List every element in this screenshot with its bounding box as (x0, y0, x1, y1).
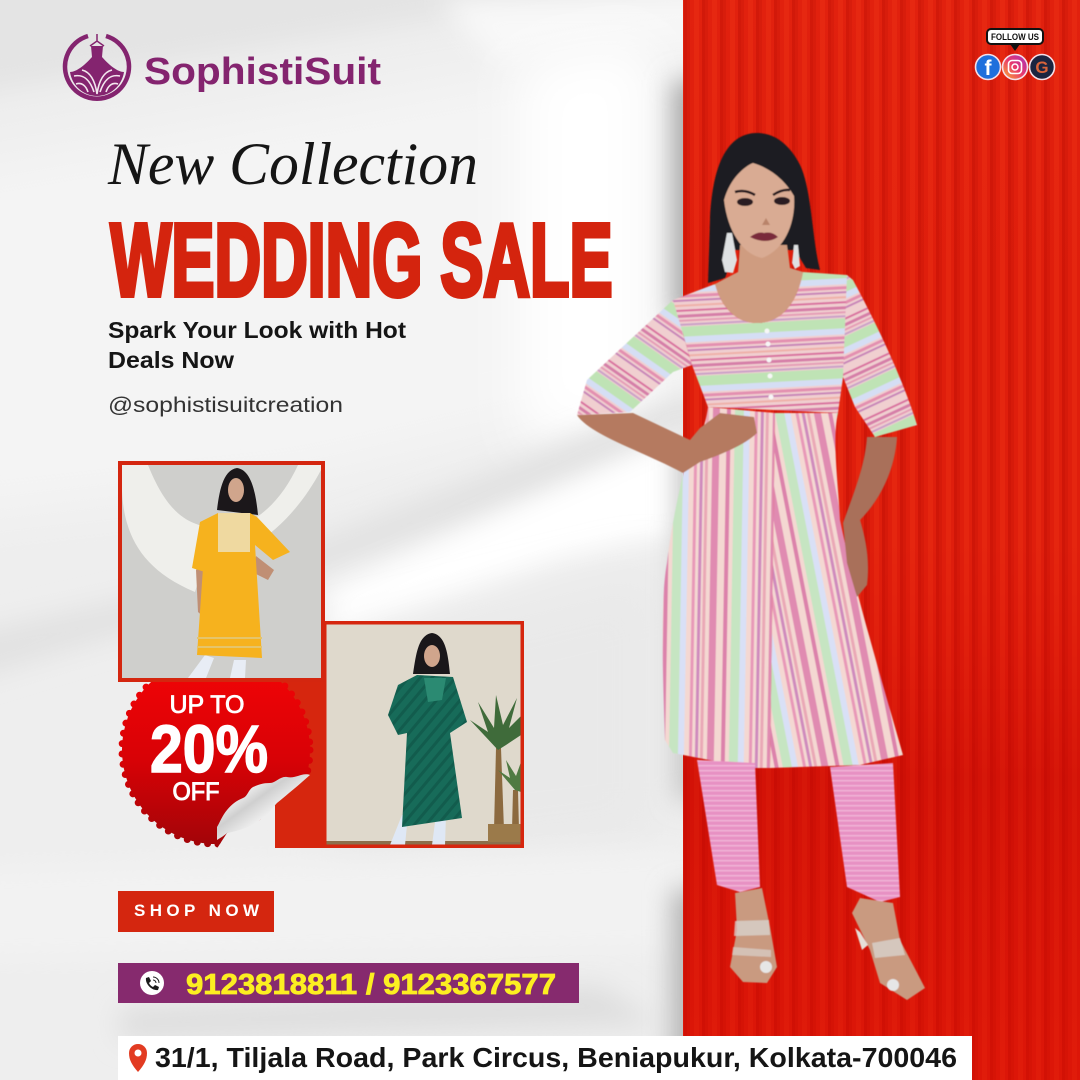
photo: green kurta (326, 624, 522, 845)
photo frame: green kurta (326, 624, 521, 845)
address text: 31/1, Tiljala Road, Park Circus, Beniapukur, Kolkata-700046 (155, 1042, 957, 1073)
kurta buttons (764, 328, 774, 400)
icon: facebook: f (984, 57, 992, 80)
pants (697, 760, 900, 902)
fabric background (0, 0, 740, 1080)
tagline: Spark Your Look with Hot (108, 317, 406, 343)
right foot and sandal (852, 898, 925, 1000)
brows, eyes, nose and lips (735, 190, 790, 241)
social handle: @sophistisuitcreation (108, 394, 343, 417)
photo: yellow kurta (118, 461, 325, 682)
tagline (108, 317, 406, 373)
badge text: OFF (172, 778, 220, 806)
left sleeve (577, 300, 692, 415)
right sleeve (843, 275, 917, 437)
shop now button: SHOP NOW (134, 901, 260, 920)
follow us social icons (976, 29, 1054, 80)
main heading: WEDDING SALE (110, 202, 612, 318)
logo (65, 34, 381, 99)
follow us bubble: FOLLOW US (991, 32, 1039, 43)
phone numbers: 9123818811 / 9123367577 (186, 969, 556, 1001)
red ribbed panel (683, 0, 1080, 1080)
face (724, 163, 794, 258)
left foot and sandal (730, 888, 777, 983)
earrings (722, 233, 800, 273)
phone bar (118, 963, 579, 1003)
icon: phone (140, 971, 164, 995)
model photo (577, 133, 925, 1000)
neck and chest (715, 245, 803, 323)
red square behind second photo (275, 621, 524, 848)
script heading: New Collection (107, 131, 478, 197)
peeled corner (217, 774, 310, 840)
badge text: 20% (150, 712, 268, 787)
discount badge (122, 656, 310, 844)
badge text (150, 691, 268, 806)
left arm and hand (577, 413, 757, 473)
badge text: UP TO (170, 691, 244, 719)
hair (708, 133, 820, 283)
logo wordmark: SophistiSuit (144, 51, 381, 93)
badge seal (122, 656, 310, 844)
shop now button (118, 891, 274, 932)
icon: google: G (1035, 58, 1049, 77)
icon: location pin (129, 1044, 147, 1072)
kurta skirt (663, 407, 903, 768)
right arm and hand (843, 437, 897, 597)
tagline: Deals Now (108, 347, 234, 373)
logo emblem (65, 34, 129, 99)
address bar (118, 1036, 972, 1080)
kurta bodice (673, 272, 853, 413)
icon: instagram (1002, 54, 1028, 80)
